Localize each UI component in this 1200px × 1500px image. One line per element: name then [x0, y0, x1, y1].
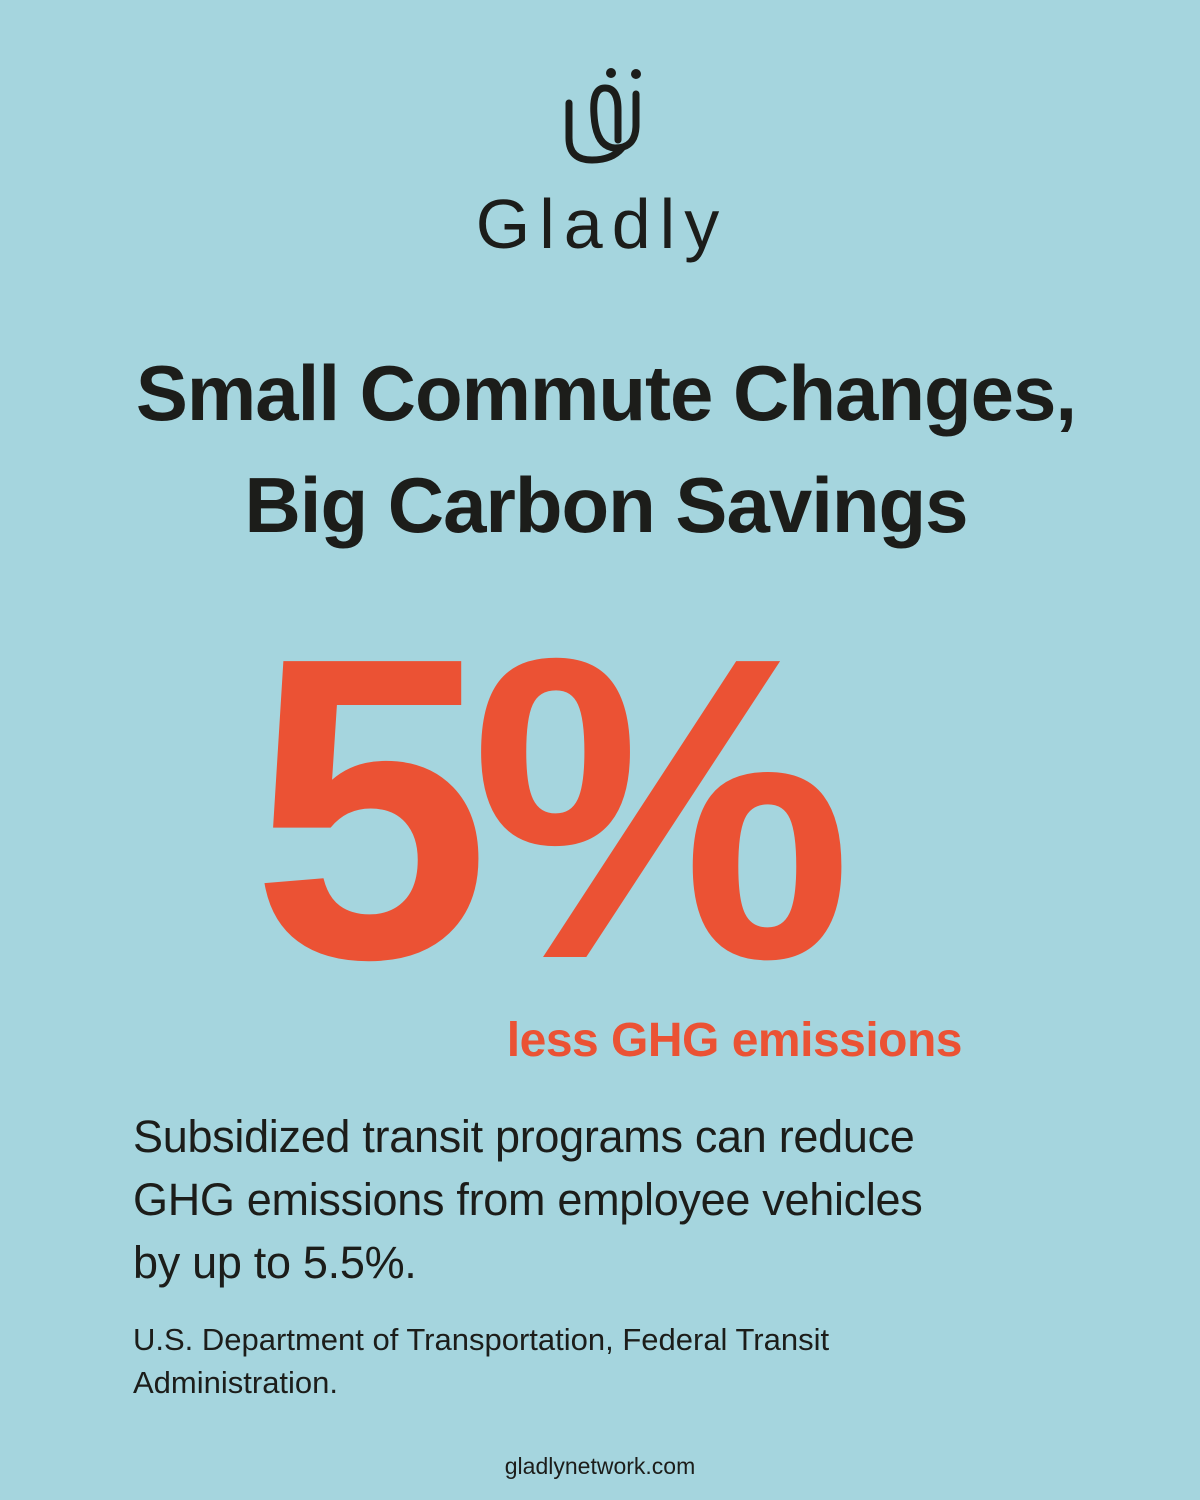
body text: Subsidized transit programs can reduce — [133, 1111, 915, 1162]
stat label: less GHG emissions — [507, 1014, 962, 1067]
logo icon — [566, 68, 641, 164]
body text: GHG emissions from employee vehicles — [133, 1174, 922, 1225]
source: Administration. — [133, 1365, 338, 1400]
big stat: 5% — [251, 569, 833, 1049]
source: U.S. Department of Transportation, Federal Transit — [133, 1322, 829, 1357]
title: Small Commute Changes, — [136, 349, 1076, 437]
text: Big Carbon Savings — [244, 461, 968, 549]
body text: by up to 5.5%. — [133, 1237, 416, 1288]
wordmark: Gladly — [476, 185, 728, 263]
body text — [133, 1111, 922, 1288]
footer url: gladlynetwork.com — [505, 1453, 695, 1479]
source — [133, 1322, 829, 1400]
